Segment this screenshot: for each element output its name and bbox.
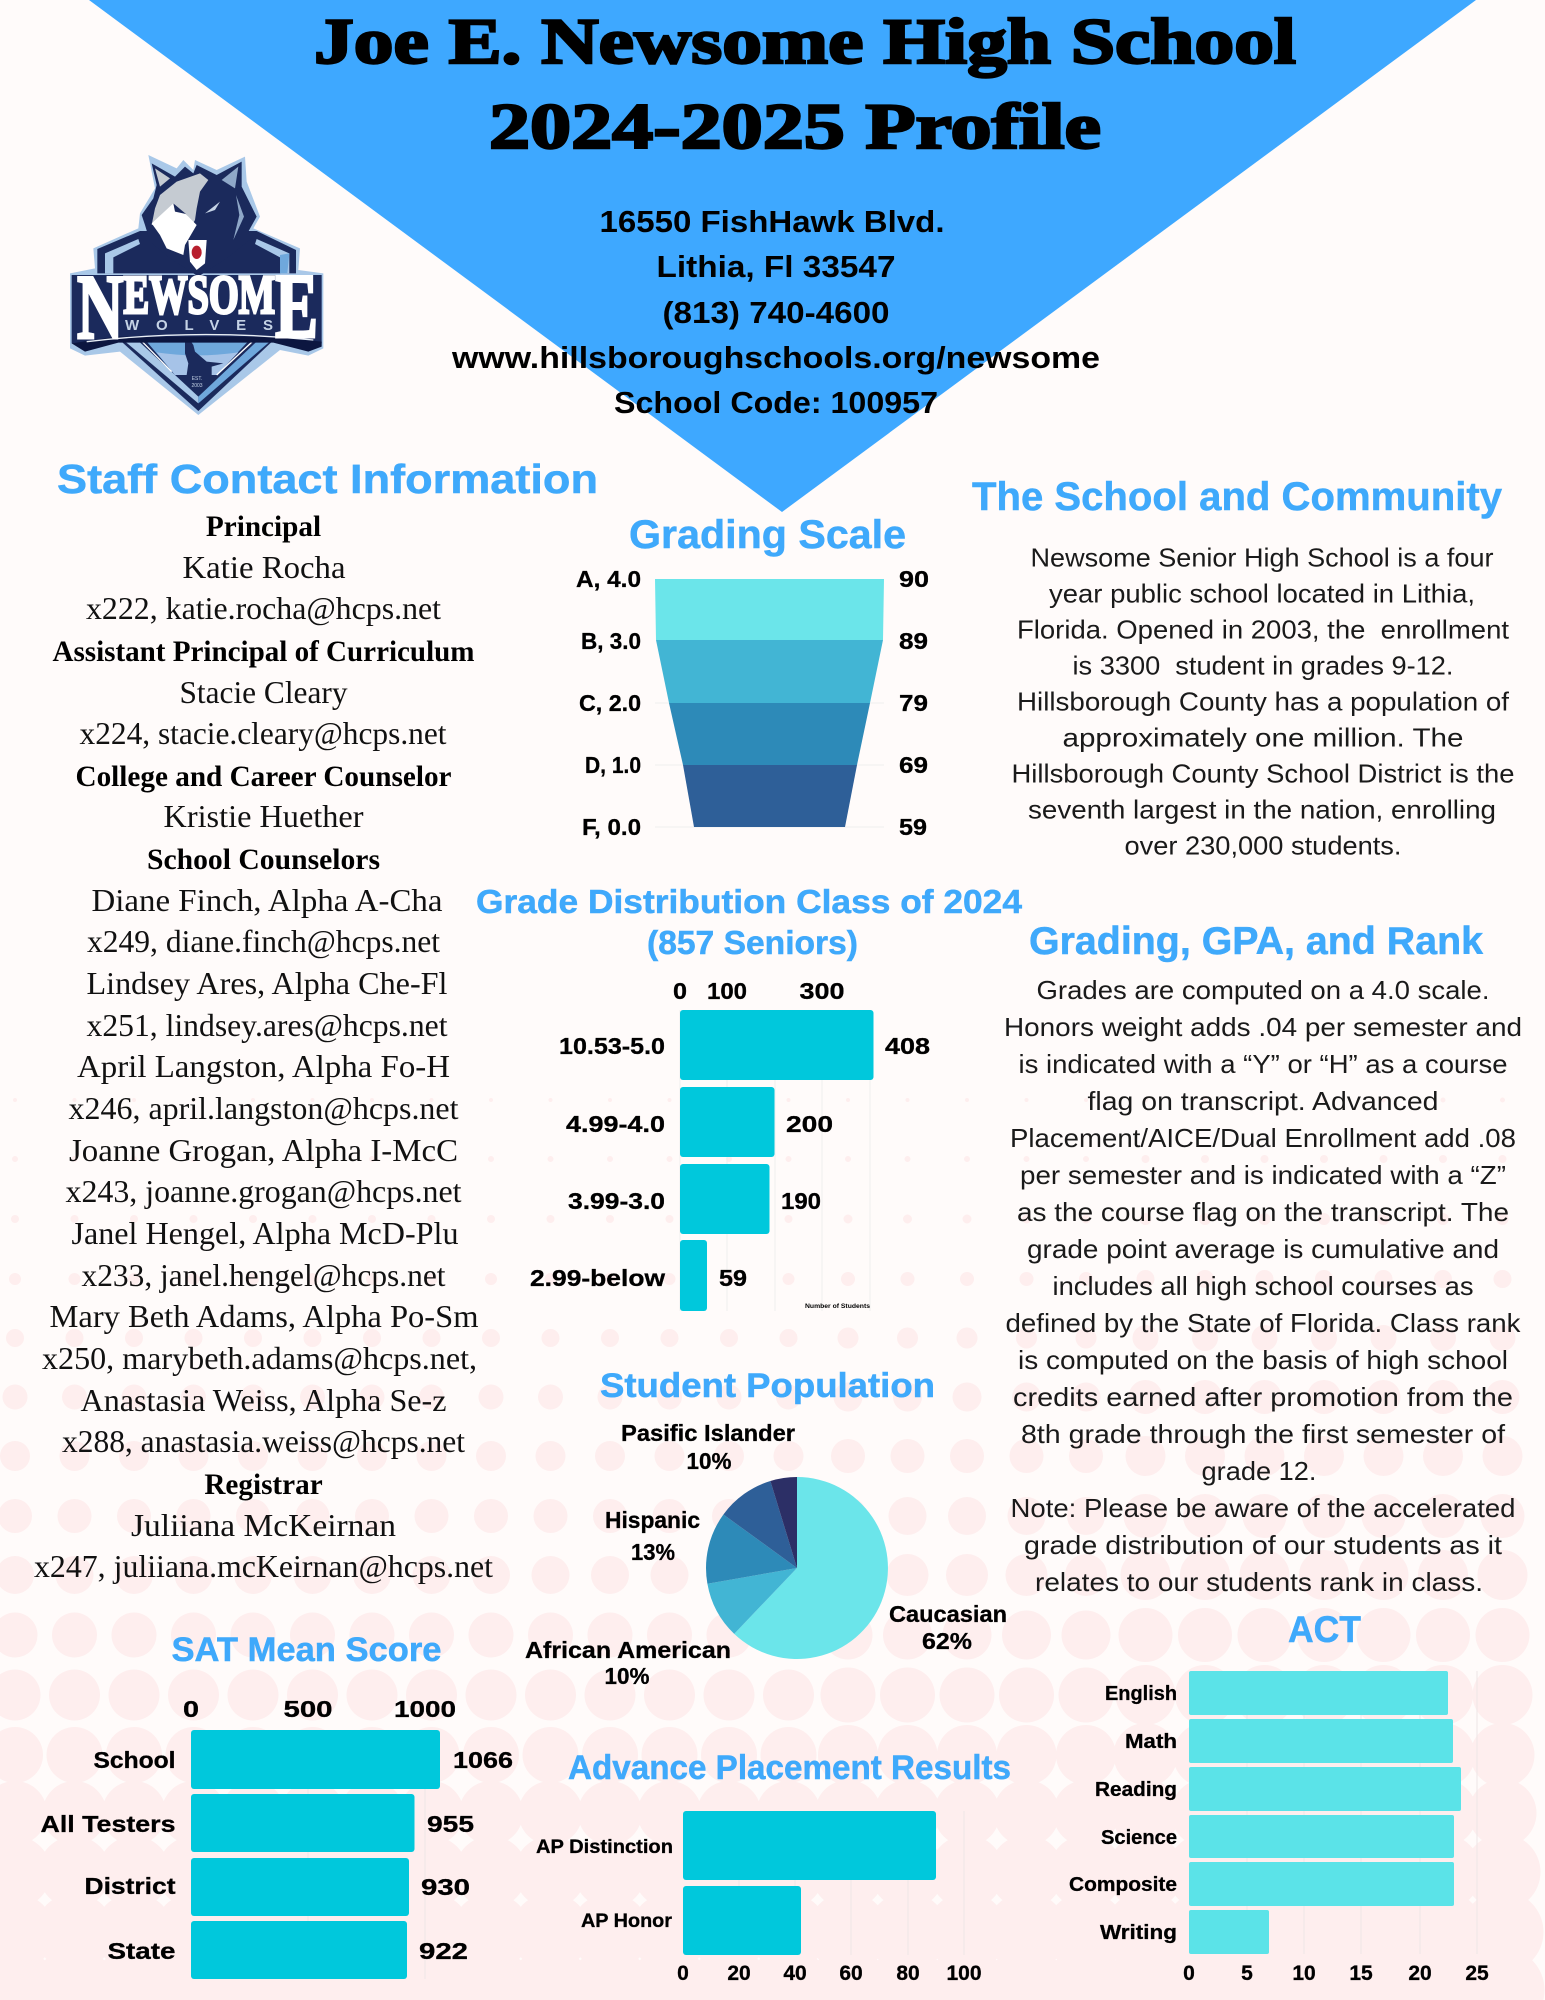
community paragraph: Florida. Opened in 2003, the enrollment [1017, 615, 1510, 645]
heading: AP: Advance Placement Results [568, 1749, 1011, 1787]
bar chart: grade distribution: 2.99-below [530, 1265, 665, 1291]
bar chart: AP [536, 1811, 982, 1985]
staff list: x233, janel.hengel@hcps.net [82, 1257, 446, 1293]
bar chart: grade distribution: 100 [707, 978, 747, 1004]
bar chart: grade distribution: 4.99-4.0 [566, 1111, 665, 1137]
staff list: x222, katie.rocha@hcps.net [86, 590, 441, 626]
bar chart: grade distribution: 200 [786, 1111, 833, 1137]
bar chart: SAT: All Testers [40, 1811, 176, 1837]
funnel chart: B, 3.0 [581, 628, 641, 654]
bar chart: SAT: 930 [421, 1874, 470, 1900]
panel: grade distribution [476, 883, 1023, 1311]
school address and contact block: School Code: 100957 [614, 386, 938, 420]
bar chart: grade distribution [530, 978, 930, 1311]
funnel chart [576, 566, 929, 840]
icon: Newsome Wolves shield logo [70, 155, 323, 415]
grading paragraph: as the course flag on the transcript. The [1017, 1197, 1509, 1227]
staff list: Lindsey Ares, Alpha Che-Fl [86, 965, 448, 1001]
bar chart: AP: 0 [677, 1962, 689, 1985]
school address and contact block: 16550 FishHawk Blvd. [600, 205, 944, 239]
bar chart: AP: 100 [946, 1962, 982, 1985]
heading: grade distribution: Grade Distribution Class of 2024 [476, 883, 1023, 920]
community paragraph: year public school located in Lithia, [1049, 579, 1475, 609]
staff list: Joanne Grogan, Alpha I-McC [69, 1132, 458, 1168]
school address and contact block: (813) 740-4600 [662, 296, 890, 330]
pie labels: 62% [922, 1628, 972, 1654]
grading paragraph: includes all high school courses as [1052, 1271, 1474, 1301]
funnel chart: D, 1.0 [585, 752, 641, 778]
staff list: School Counselors [147, 844, 380, 876]
heading: staff contact: Staff Contact Information [57, 456, 598, 502]
bar chart: SAT [40, 1696, 513, 1979]
bar chart: ACT: Science [1101, 1827, 1177, 1849]
staff list: x249, diane.finch@hcps.net [87, 923, 440, 959]
bar chart: SAT: 955 [427, 1811, 474, 1837]
pie labels: Hispanic [605, 1507, 700, 1533]
panel: grading, GPA and rank [1004, 920, 1522, 1597]
funnel chart: F, 0.0 [582, 814, 641, 840]
heading: grading scale: Grading Scale [629, 513, 906, 557]
icon: Newsome Wolves shield logo: EST. [192, 376, 202, 382]
grading paragraph: relates to our students rank in class. [1035, 1567, 1483, 1597]
bar chart: ACT: 25 [1465, 1962, 1489, 1985]
panel: school and community [972, 475, 1514, 861]
bar chart: grade distribution: 300 [800, 978, 844, 1004]
bar chart: SAT: State [108, 1938, 176, 1964]
grading paragraph: per semester and is indicated with a “Z” [1020, 1160, 1506, 1190]
staff list: x243, joanne.grogan@hcps.net [66, 1173, 462, 1209]
bar chart: AP: AP Honor [581, 1911, 673, 1932]
header triangle banner [89, 0, 1476, 512]
pie labels: 10% [686, 1448, 732, 1474]
bar chart: AP: 20 [727, 1962, 751, 1985]
community paragraph: Hillsborough County School District is the [1012, 759, 1514, 789]
bar chart: SAT: 1066 [453, 1747, 513, 1773]
community paragraph: over 230,000 students. [1124, 831, 1402, 861]
panel: grading scale [576, 513, 929, 840]
bar chart: grade distribution: Number of Students [805, 1303, 870, 1310]
bar chart: AP: AP Distinction [536, 1837, 673, 1858]
heading: grading GPA rank: Grading, GPA, and Rank [1029, 920, 1483, 963]
pie labels: 10% [604, 1663, 650, 1689]
staff list: x251, lindsey.ares@hcps.net [86, 1007, 448, 1043]
icon: Newsome Wolves shield logo: EWSOM [123, 264, 275, 325]
bar chart: ACT: 10 [1292, 1962, 1316, 1985]
icon: Newsome Wolves shield logo: WOLVES [125, 317, 273, 334]
bar chart: grade distribution: 408 [885, 1033, 930, 1059]
staff list: Juliiana McKeirnan [131, 1507, 396, 1543]
community paragraph [1012, 543, 1514, 861]
bar chart: SAT: School [94, 1747, 176, 1773]
community paragraph: Newsome Senior High School is a four [1030, 543, 1494, 573]
title [314, 6, 1296, 163]
staff list: Kristie Huether [164, 798, 364, 834]
bar chart: AP: 80 [896, 1962, 920, 1985]
grading paragraph: flag on transcript. Advanced [1088, 1086, 1438, 1116]
staff list: Stacie Cleary [180, 674, 348, 710]
staff list: Janel Hengel, Alpha McD-Plu [72, 1215, 459, 1251]
funnel chart: 59 [899, 814, 927, 840]
title: 2024-2025 Profile [489, 91, 1101, 163]
bar chart: ACT: 0 [1183, 1962, 1195, 1985]
grading paragraph: grade distribution of our students as it [1024, 1530, 1503, 1560]
heading: grade distribution [476, 883, 1023, 961]
staff list: x224, stacie.cleary@hcps.net [80, 715, 447, 751]
grading paragraph: 8th grade through the first semester of [1021, 1419, 1506, 1449]
heading: student population: Student Population [600, 1367, 935, 1405]
community paragraph: Hillsborough County has a population of [1017, 687, 1510, 717]
panel: advanced placement results [536, 1749, 1011, 1985]
staff list: College and Career Counselor [76, 761, 452, 793]
panel: student population [525, 1367, 1007, 1689]
bar chart: SAT: 1000 [394, 1696, 456, 1722]
pie labels: Caucasian [889, 1601, 1007, 1627]
pie labels: African American [525, 1637, 731, 1663]
bar chart: SAT: 500 [284, 1696, 332, 1722]
bar chart: SAT: 922 [419, 1938, 468, 1964]
staff list: x288, anastasia.weiss@hcps.net [62, 1423, 465, 1459]
bar chart: ACT: Writing [1100, 1922, 1177, 1944]
bar chart: ACT: Reading [1095, 1779, 1177, 1801]
bar chart: grade distribution: 10.53-5.0 [559, 1033, 665, 1059]
grading paragraph: Grades are computed on a 4.0 scale. [1036, 975, 1490, 1005]
bar chart: ACT: 15 [1349, 1962, 1373, 1985]
community paragraph: is 3300 student in grades 9-12. [1072, 651, 1454, 681]
staff list: April Langston, Alpha Fo-H [77, 1048, 450, 1084]
bar chart: AP: 40 [783, 1962, 807, 1985]
community paragraph: seventh largest in the nation, enrolling [1028, 795, 1496, 825]
grading paragraph: Honors weight adds .04 per semester and [1004, 1012, 1522, 1042]
funnel chart: 79 [899, 690, 928, 716]
bar chart: ACT: Composite [1069, 1874, 1177, 1896]
funnel chart: 69 [899, 752, 928, 778]
staff list: Assistant Principal of Curriculum [52, 636, 474, 668]
bar chart: SAT: 0 [183, 1696, 199, 1722]
bar chart: ACT: 20 [1408, 1962, 1432, 1985]
bar chart: grade distribution: 0 [673, 978, 687, 1004]
staff list: Registrar [204, 1469, 323, 1501]
community paragraph: approximately one million. The [1062, 723, 1464, 753]
grading paragraph: defined by the State of Florida. Class rank [1006, 1308, 1522, 1338]
icon: Newsome Wolves shield logo: E [275, 255, 318, 357]
grading paragraph: grade 12. [1202, 1456, 1316, 1486]
staff list: Diane Finch, Alpha A-Cha [92, 882, 442, 918]
grading paragraph [1004, 975, 1522, 1597]
bar chart: SAT: District [84, 1873, 176, 1899]
title: Joe E. Newsome High School [314, 6, 1296, 78]
bar chart: ACT: 5 [1241, 1962, 1253, 1985]
panel: staff contact information [34, 456, 598, 1584]
school address and contact block: www.hillsboroughschools.org/newsome [451, 341, 1100, 375]
school address and contact block: Lithia, Fl 33547 [656, 250, 896, 284]
heading: school and community: The School and Community [972, 475, 1503, 519]
panel: SAT mean score [40, 1631, 513, 1979]
bar chart: grade distribution: 59 [719, 1265, 747, 1291]
staff list: x250, marybeth.adams@hcps.net, [42, 1340, 477, 1376]
icon: Newsome Wolves shield logo: N [77, 256, 123, 358]
pie labels [525, 1420, 1007, 1689]
funnel chart: A, 4.0 [576, 566, 641, 592]
staff list [34, 511, 493, 1584]
pie chart [706, 1477, 888, 1659]
bar chart: ACT [1069, 1671, 1489, 1985]
grading paragraph: Placement/AICE/Dual Enrollment add .08 [1010, 1123, 1516, 1153]
staff list: Katie Rocha [182, 549, 346, 585]
grading paragraph: is computed on the basis of high school [1018, 1345, 1508, 1375]
bar chart: grade distribution: 3.99-3.0 [568, 1188, 665, 1214]
pie labels: Pasific Islander [621, 1420, 795, 1446]
grading paragraph: is indicated with a “Y” or “H” as a course [1018, 1049, 1508, 1079]
grading paragraph: Note: Please be aware of the accelerated [1010, 1493, 1516, 1523]
funnel chart: 89 [899, 628, 928, 654]
heading: SAT: SAT Mean Score [172, 1631, 442, 1669]
staff list: x246, april.langston@hcps.net [68, 1090, 459, 1126]
heading: grade distribution: (857 Seniors) [647, 924, 858, 961]
grading paragraph: credits earned after promotion from the [1013, 1382, 1513, 1412]
staff list: Mary Beth Adams, Alpha Po-Sm [50, 1298, 479, 1334]
grading paragraph: grade point average is cumulative and [1027, 1234, 1499, 1264]
panel: ACT [1069, 1609, 1489, 1985]
bar chart: AP: 60 [839, 1962, 863, 1985]
staff list: Principal [206, 511, 321, 543]
staff list: Anastasia Weiss, Alpha Se-z [80, 1382, 446, 1418]
bar chart: ACT: English [1105, 1683, 1177, 1705]
funnel chart: C, 2.0 [579, 690, 641, 716]
funnel chart: 90 [899, 566, 929, 592]
pie labels: 13% [631, 1539, 675, 1565]
heading: ACT: ACT [1288, 1609, 1361, 1650]
bar chart: grade distribution: 190 [781, 1188, 821, 1214]
icon: Newsome Wolves shield logo: 2003 [191, 383, 203, 389]
school address and contact block [451, 205, 1100, 420]
staff list: x247, juliiana.mcKeirnan@hcps.net [34, 1548, 493, 1584]
bar chart: ACT: Math [1125, 1731, 1177, 1753]
